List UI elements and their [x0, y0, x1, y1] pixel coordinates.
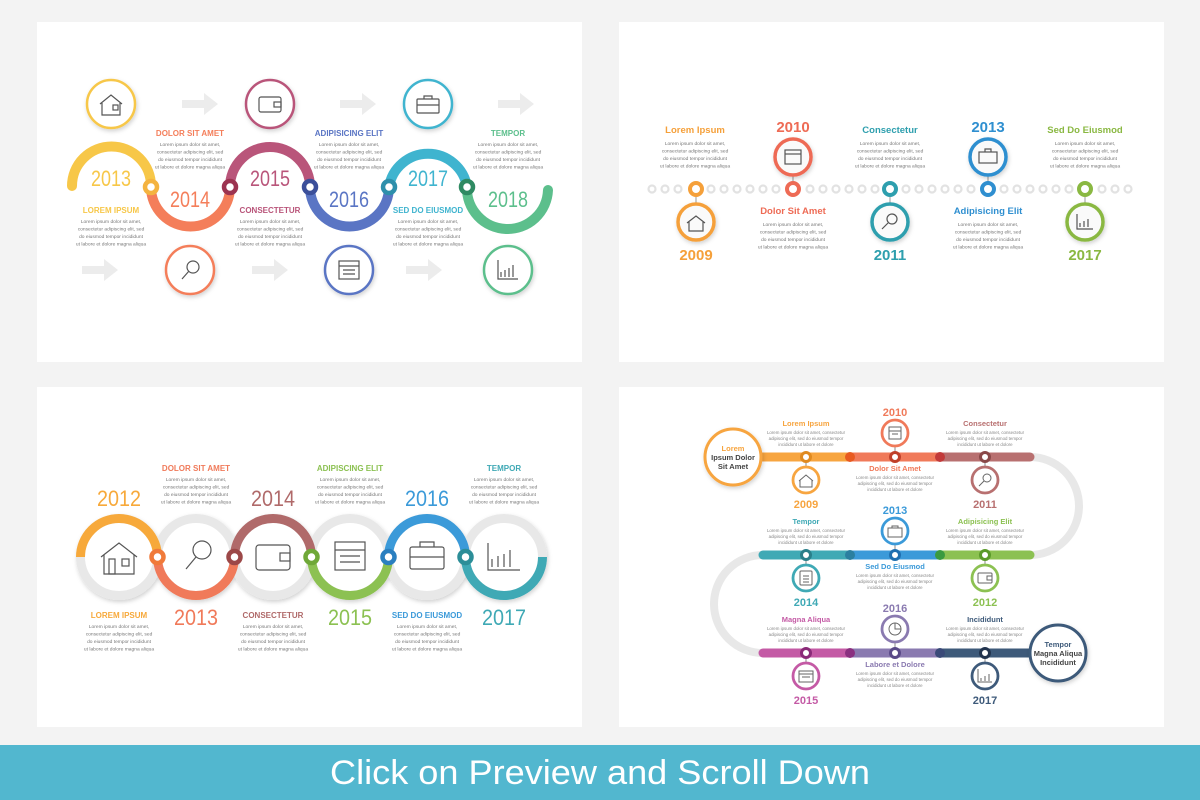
years: 2015: [794, 695, 818, 707]
titles and text: Labore et Dolore: [865, 660, 925, 669]
panel: ring chain timeline: [37, 387, 582, 727]
years: 2010: [776, 119, 810, 136]
titles and text: ADIPISICING ELIT: [315, 129, 383, 138]
years: 2010: [883, 407, 907, 419]
footer banner: Click on Preview and Scroll Down: [330, 754, 870, 792]
years: 2013: [883, 505, 907, 517]
gray loops: [714, 457, 1079, 653]
nodes: [145, 181, 473, 193]
milestones: [678, 139, 1103, 240]
titles and text: SED DO EIUSMOD: [392, 611, 462, 620]
years: 2017: [1068, 247, 1102, 264]
icon circles: [793, 420, 998, 689]
titles and text: Consectetur: [963, 419, 1007, 428]
wave arcs: [72, 146, 548, 229]
titles and text: Lorem Ipsum: [782, 419, 830, 428]
titles and text: Adipisicing Elit: [954, 206, 1023, 217]
years: 2013: [174, 605, 218, 630]
titles and text: Incididunt: [967, 615, 1003, 624]
titles and text: [660, 125, 1123, 250]
stems and nodes: [802, 445, 990, 665]
small icons: [799, 427, 992, 682]
titles and text: LOREM IPSUM: [91, 611, 148, 620]
titles and text: Lorem Ipsum: [665, 125, 725, 136]
years: 2017: [482, 605, 526, 630]
titles and text: Dolor Sit Amet: [760, 206, 827, 217]
years: 2009: [794, 499, 818, 511]
years: 2016: [883, 603, 907, 615]
start/end labels: Lorem: [722, 444, 745, 453]
titles and text: TEMPOR: [487, 464, 521, 473]
bars: [760, 457, 1040, 653]
start/end labels: [711, 444, 1083, 667]
titles and text: Sed Do Eiusmod: [865, 562, 925, 571]
start/end labels: Tempor: [1045, 640, 1072, 649]
titles and text: Dolor Sit Amet: [869, 464, 921, 473]
footer banner: [0, 745, 1200, 800]
titles and text: Tempor: [793, 517, 820, 526]
start/end labels: Magna Aliqua: [1034, 649, 1083, 658]
years: [91, 166, 528, 212]
years: 2015: [250, 166, 290, 191]
titles and text: Adipisicing Elit: [958, 517, 1013, 526]
titles and text: CONSECTETUR: [243, 611, 304, 620]
titles and text: DOLOR SIT AMET: [156, 129, 224, 138]
start/end labels: Incididunt: [1040, 658, 1076, 667]
years: 2012: [973, 597, 997, 609]
years: [97, 486, 526, 630]
dotted line: [648, 186, 1132, 192]
years: 2014: [170, 187, 210, 212]
titles and text: Magna Aliqua: [782, 615, 831, 624]
years: 2011: [973, 499, 997, 511]
titles and text: ADIPISCING ELIT: [317, 464, 383, 473]
titles and text: CONSECTETUR: [240, 206, 301, 215]
icon circles: [87, 80, 532, 294]
years: 2015: [328, 605, 372, 630]
years: 2013: [971, 119, 1005, 136]
years: [679, 119, 1102, 264]
nodes: [152, 551, 472, 563]
years: 2016: [329, 187, 369, 212]
panel: dotted timeline: [619, 22, 1164, 362]
gray rings: [80, 518, 542, 596]
titles and text: LOREM IPSUM: [83, 206, 140, 215]
titles and text: Consectetur: [862, 125, 918, 136]
years: 2016: [405, 486, 449, 511]
titles and text: TEMPOR: [491, 129, 525, 138]
years: 2014: [251, 486, 295, 511]
titles and text: [767, 419, 1025, 688]
icons: [101, 541, 520, 574]
years: 2011: [874, 247, 906, 264]
years: [794, 407, 997, 707]
years: 2013: [91, 166, 131, 191]
years: 2014: [794, 597, 819, 609]
joint dots: [845, 452, 945, 658]
start/end labels: Ipsum Dolor: [711, 453, 755, 462]
colored arcs: [80, 518, 542, 596]
years: 2018: [488, 187, 528, 212]
panel: snake timeline: [619, 387, 1164, 727]
years: 2017: [408, 166, 448, 191]
panel: wave timeline: [37, 22, 582, 362]
gray arrows: [82, 93, 534, 281]
titles and text: DOLOR SIT AMET: [162, 464, 230, 473]
years: 2009: [679, 247, 713, 264]
titles and text: [76, 129, 543, 248]
start/end labels: Sit Amet: [718, 462, 749, 471]
start and end circles: [705, 429, 1086, 681]
icons: [100, 95, 518, 279]
titles and text: Sed Do Eiusmod: [1047, 125, 1123, 136]
years: 2017: [973, 695, 997, 707]
years: 2012: [97, 486, 141, 511]
titles and text: SED DO EIUSMOD: [393, 206, 463, 215]
titles and text: [84, 464, 539, 652]
